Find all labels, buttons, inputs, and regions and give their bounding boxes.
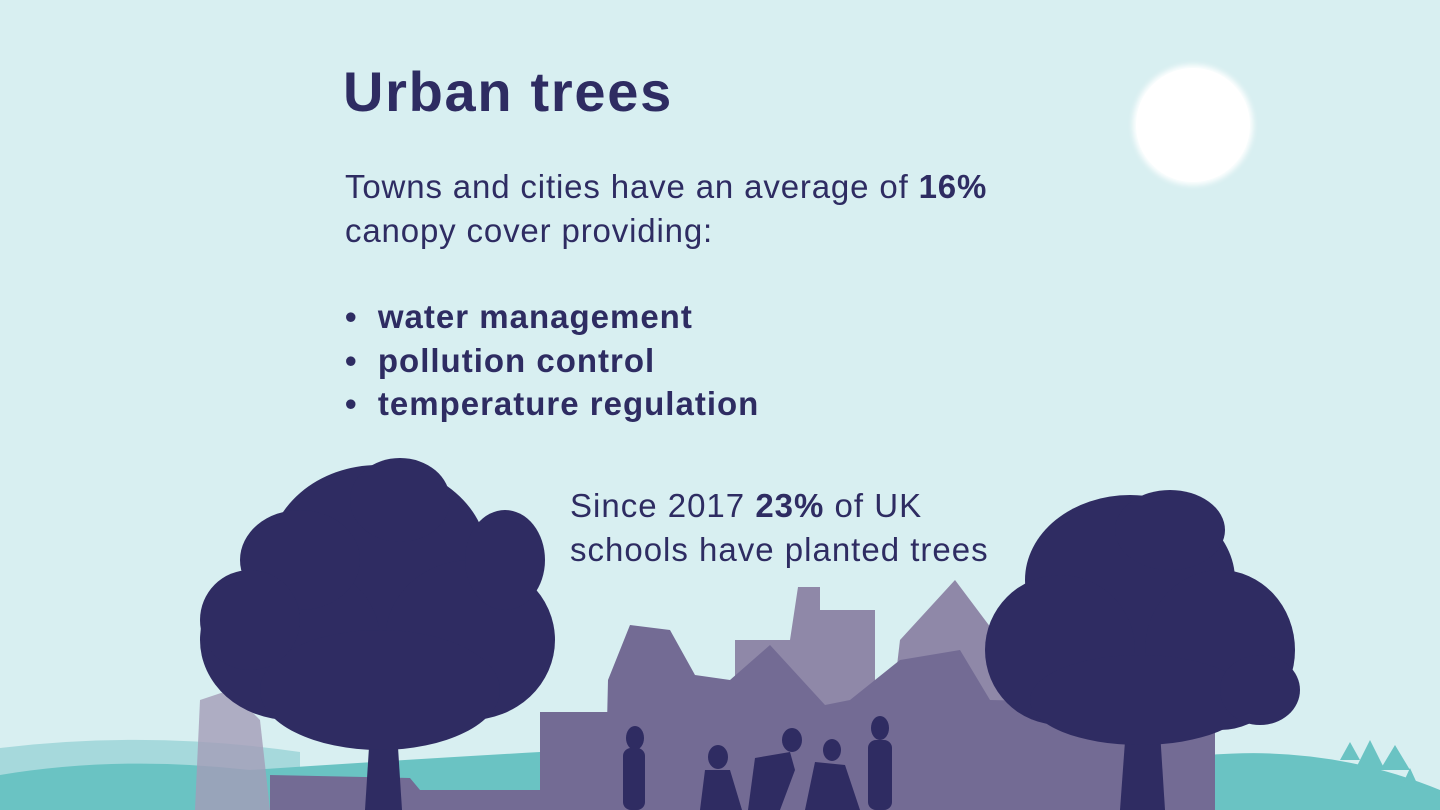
bullet list	[345, 298, 759, 422]
left tree	[200, 458, 555, 810]
bullet list: • temperature regulation	[345, 385, 759, 422]
buildings	[195, 580, 1215, 810]
sun	[1136, 68, 1250, 182]
intro text	[345, 168, 987, 249]
schools stat	[570, 487, 989, 568]
schools stat: Since 2017 23% of UK	[570, 487, 922, 524]
title: Urban trees	[343, 60, 673, 123]
right tree	[985, 490, 1300, 810]
schools stat: schools have planted trees	[570, 531, 989, 568]
bullet list: • water management	[345, 298, 693, 335]
intro text: canopy cover providing:	[345, 212, 713, 249]
bullet list: • pollution control	[345, 342, 655, 378]
intro text: Towns and cities have an average of 16%	[345, 168, 987, 205]
hills	[0, 740, 1440, 810]
children	[623, 716, 892, 810]
